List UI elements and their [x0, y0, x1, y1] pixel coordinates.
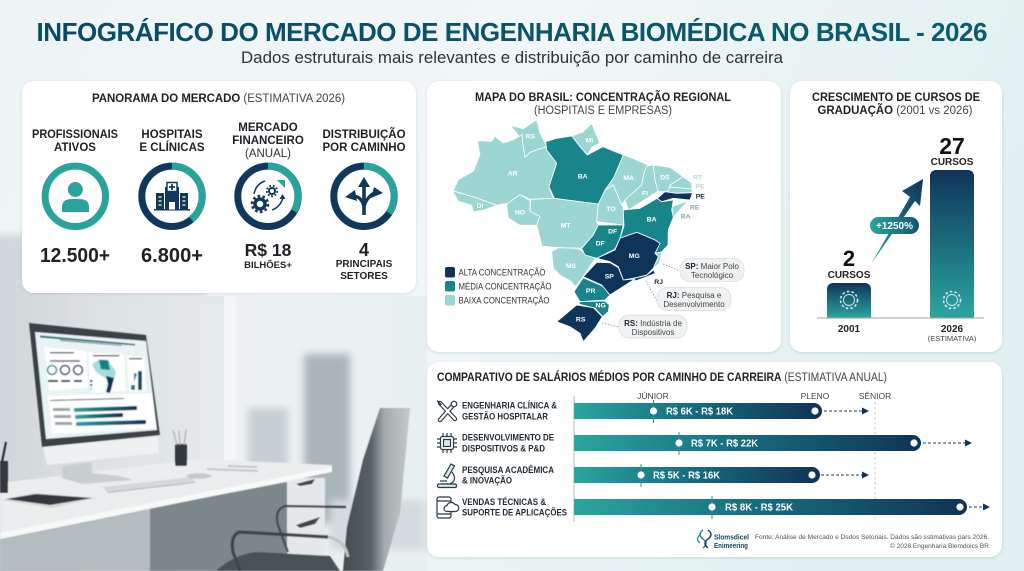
map of Brazil by state: RE: [690, 204, 700, 211]
callout: SP: Tecnológico: [691, 271, 734, 280]
panel: panorama do mercado: [22, 81, 416, 293]
panel: mapa do Brasil: (HOSPITAIS E EMPRESAS): [534, 105, 672, 117]
map of Brazil by state: [452, 120, 705, 342]
keyboard, mouse, tablet: [103, 477, 195, 492]
row: pesquisa acadêmica: PESQUISA ACADÊMICA: [462, 464, 554, 476]
salary heading: COMPARATIVO DE SALÁRIOS MÉDIOS POR CAMINHO DE CARREIRA (ESTIMATIVA ANUAL): [437, 371, 887, 384]
stat: hospitais e clínicas: HOSPITAIS: [141, 129, 203, 141]
map of Brazil by state: SP: [605, 273, 614, 280]
map of Brazil by state: FI: [642, 190, 648, 197]
growth heading: CRESCIMENTO DE CURSOS DE: [812, 92, 980, 104]
map of Brazil by state: NO: [515, 209, 526, 216]
bar: 2026: 2026: [941, 324, 964, 335]
growth badge: +1250%: [876, 221, 913, 232]
map of Brazil by state: MT: [561, 222, 571, 229]
level labels: [637, 391, 891, 401]
stat: mercado financeiro: BILHÕES+: [244, 260, 292, 271]
stat: profissionais ativos: 12.500+: [40, 245, 110, 267]
monitor: [43, 437, 159, 465]
map of Brazil by state: DI: [477, 203, 484, 210]
map of Brazil by state: RJ: [654, 279, 663, 286]
row: desenvolvimento de dispositivos: R$ 7K - R$ 22K: [691, 438, 759, 450]
stat: distribuição por caminho: DISTRIBUIÇÃO: [322, 128, 406, 141]
row: vendas técnicas: SUPORTE DE APLICAÇÕES: [462, 508, 567, 518]
bar: 2026: [928, 133, 977, 343]
map of Brazil by state: TO: [606, 206, 616, 213]
map legend: [445, 267, 552, 306]
map of Brazil by state: MS: [566, 263, 577, 270]
bar: 2026: (ESTIMATIVA): [928, 334, 977, 343]
desk: [0, 482, 287, 571]
callout: RJ: RJ: Pesquisa e: [667, 291, 722, 300]
map heading: MAPA DO BRASIL: CONCENTRAÇÃO REGIONAL: [475, 91, 731, 104]
bar: 2001: 2: [843, 246, 855, 271]
chair: [343, 408, 410, 571]
map of Brazil by state: PE: [696, 194, 705, 201]
map legend: BAIXA CONCENTRAÇÃO: [458, 296, 550, 306]
callout: RJ: [646, 281, 731, 310]
background photo: office desk with monitor: [0, 235, 427, 571]
pencil holders: [175, 444, 187, 466]
callout: SP: [663, 258, 744, 282]
stat: profissionais ativos: [32, 129, 118, 267]
callout: RS: Dispositivos: [632, 328, 674, 337]
source note: © 2028 Engenharia Blemdoics BR: [890, 542, 989, 550]
panel: crescimento de cursos: GRADUAÇÃO (2001 vs 2026): [818, 104, 973, 117]
bar: 2001: 2001: [838, 324, 861, 335]
map of Brazil by state: MA: [623, 175, 634, 182]
stat: distribuição por caminho: POR CAMINHO: [322, 142, 406, 154]
heading: [36, 17, 988, 67]
stat: mercado financeiro: [232, 122, 304, 271]
stat: distribuição por caminho: SETORES: [340, 271, 388, 282]
map of Brazil by state: AR: [508, 171, 518, 178]
panel heading: PANORAMA DO MERCADO (ESTIMATIVA 2026): [92, 93, 345, 105]
panel: crescimento de cursos: [790, 81, 1002, 352]
growth badge: [870, 217, 919, 234]
row: desenvolvimento de dispositivos: DISPOSITIVOS & P&D: [462, 444, 545, 454]
axis line: [817, 318, 984, 319]
map of Brazil by state: BA: [578, 174, 588, 181]
map of Brazil by state: DF: [608, 228, 617, 235]
row: vendas técnicas: [437, 496, 990, 519]
callout: RJ: Desenvolvimento: [663, 300, 725, 309]
map of Brazil by state: DS: [660, 174, 670, 181]
stat: mercado financeiro: (ANUAL): [245, 148, 291, 160]
source note: Fonte: Análise de Mercado e Dsdos Setoriais. Dados são sstimativas pars 2026.: [755, 534, 989, 541]
row: engenharia clínica: GESTÃO HOSPITALAR: [462, 412, 548, 422]
stat: hospitais e clínicas: [139, 129, 205, 267]
stat: distribuição por caminho: [322, 128, 406, 282]
level labels: SÊNIOR: [859, 391, 891, 401]
map legend: ALTA CONCENTRAÇÃO: [458, 268, 546, 278]
level labels: PLENO: [801, 391, 830, 401]
callout: RS: [602, 315, 687, 338]
bar: 2026: 27: [939, 133, 965, 159]
row: desenvolvimento de dispositivos: [437, 432, 972, 455]
bar: 2001: [827, 246, 871, 335]
panel: comparativo de salários: [427, 362, 1002, 557]
panel: mapa do Brasil: [427, 81, 781, 352]
level labels: JÚNIOR: [637, 391, 669, 401]
map of Brazil by state: MG: [629, 253, 640, 260]
growth arrow: [871, 179, 923, 264]
map of Brazil by state: PE: [695, 184, 705, 191]
map legend: MÉDIA CONCENTRAÇÃO: [458, 282, 552, 292]
row: vendas técnicas: VENDAS TÉCNICAS &: [462, 497, 546, 508]
row: engenharia clínica: R$ 6K - R$ 18K: [666, 406, 734, 418]
stat: mercado financeiro: MERCADO: [238, 122, 298, 134]
source note: [755, 534, 989, 550]
stat: profissionais ativos: PROFISSIONAIS: [32, 129, 118, 141]
map of Brazil by state: BA: [647, 217, 657, 224]
row: engenharia clínica: ENGENHARIA CLÍNICA &: [462, 400, 557, 412]
stat: distribuição por caminho: PRINCIPAIS: [336, 259, 393, 270]
bar: 2001: CURSOS: [828, 270, 871, 281]
map of Brazil by state: NG: [596, 302, 606, 309]
subtitle: Dados estruturais mais relevantes e distribuição por caminho de carreira: [241, 48, 784, 67]
row: desenvolvimento de dispositivos: DESENVOLVIMENTO DE: [462, 432, 554, 444]
logo: Enimeering: [714, 541, 748, 550]
callout: RS: RS: Indústria de: [624, 319, 682, 328]
stat: profissionais ativos: ATIVOS: [54, 142, 96, 154]
row: engenharia clínica: [438, 400, 869, 423]
logo: [698, 530, 749, 550]
map of Brazil by state: DF: [596, 240, 605, 247]
map of Brazil by state: BA: [681, 214, 691, 221]
stat: distribuição por caminho: 4: [359, 240, 369, 260]
map of Brazil by state: MI: [586, 138, 593, 145]
map of Brazil by state: PR: [586, 288, 595, 295]
map of Brazil by state: RT: [693, 174, 703, 181]
title: INFOGRÁFICO DO MERCADO DE ENGENHARIA BIOMÉDICA NO BRASIL - 2026: [36, 17, 988, 47]
stat: mercado financeiro: FINANCEIRO: [232, 135, 304, 147]
row: pesquisa acadêmica: & INOVAÇÃO: [462, 476, 512, 486]
stat: hospitais e clínicas: 6.800+: [141, 245, 203, 267]
callout: SP: SP: Maior Polo: [685, 262, 739, 271]
row: vendas técnicas: R$ 8K - R$ 25K: [725, 502, 794, 514]
row: pesquisa acadêmica: R$ 5K - R$ 16K: [653, 470, 721, 482]
mini screen content: [40, 336, 135, 346]
stat: mercado financeiro: R$ 18: [245, 240, 292, 260]
bar: 2026: CURSOS: [931, 157, 974, 168]
row: pesquisa acadêmica: [438, 464, 869, 488]
stat: hospitais e clínicas: E CLÍNICAS: [139, 141, 205, 154]
logo: Slomsdicel: [714, 532, 749, 542]
map of Brazil by state: RS: [526, 133, 536, 140]
map of Brazil by state: RS: [576, 317, 586, 324]
